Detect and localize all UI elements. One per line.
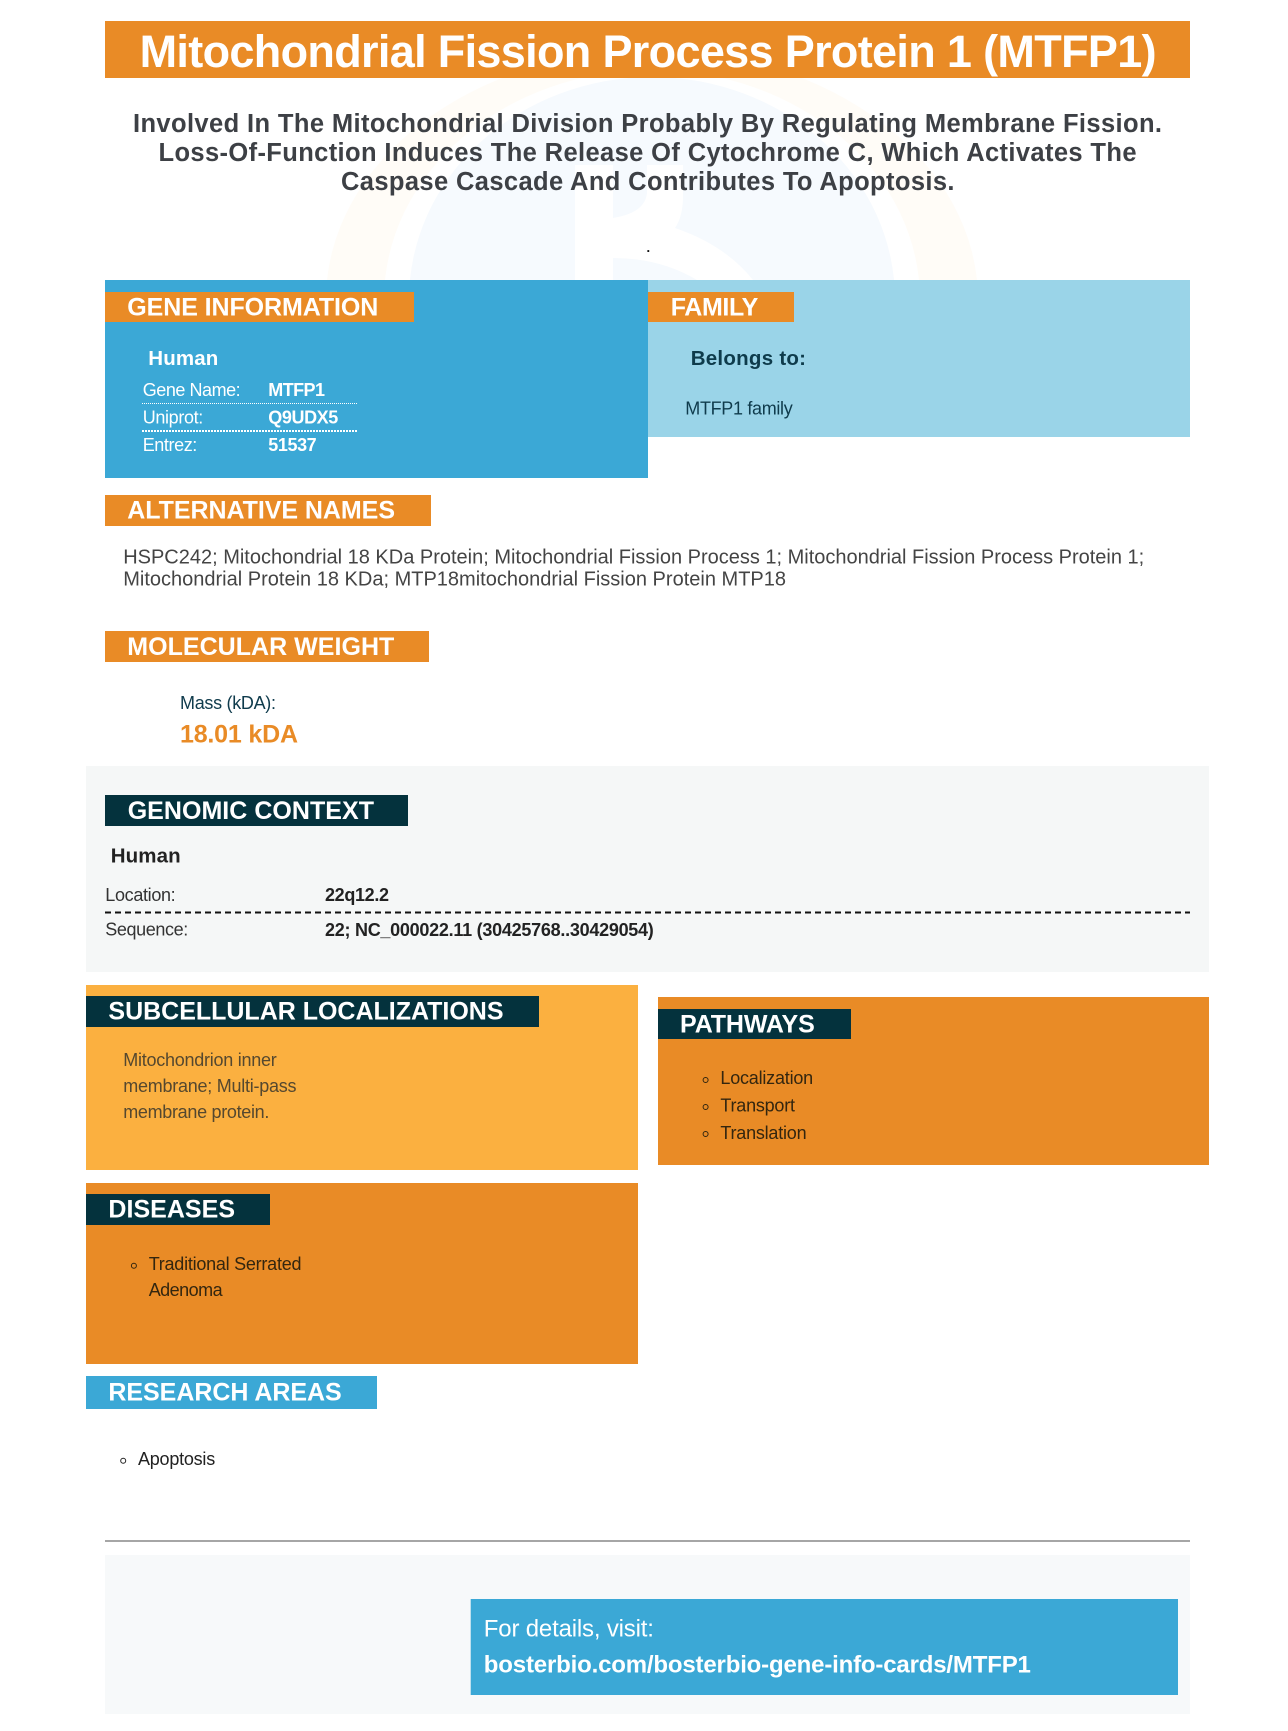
heading: diseases <box>86 1194 270 1225</box>
panel: footer <box>105 1555 1190 1714</box>
gene identifier table <box>142 380 357 455</box>
subtitle description <box>133 110 1162 196</box>
heading: alternative names: ALTERNATIVE NAMES <box>127 496 395 524</box>
callout: details link: For details, visit: <box>484 1616 654 1643</box>
subtitle description: Caspase Cascade And Contributes To Apoptosis. <box>341 168 954 196</box>
alternative names text: Mitochondrial Protein 18 KDa; MTP18mitochondrial Fission Protein MTP18 <box>123 568 786 590</box>
family name: MTFP1 family <box>685 398 793 418</box>
belongs to label: Belongs to: <box>691 347 806 370</box>
mass value: 18.01 kDA <box>180 721 298 749</box>
alternative names text: HSPC242; Mitochondrial 18 KDa Protein; Mitochondrial Fission Process 1; Mitochondrial Fission Process Protein 1; <box>123 546 1144 568</box>
panel: subcellular localizations <box>86 985 638 1170</box>
callout: details link: bosterbio.com/bosterbio-gene-info-cards/MTFP1 <box>484 1652 1031 1679</box>
watermark logo <box>410 78 894 280</box>
heading: genomic context: GENOMIC CONTEXT <box>128 797 374 825</box>
location row <box>105 885 389 905</box>
heading: diseases: DISEASES <box>108 1195 235 1223</box>
panel: genomic context <box>86 766 1209 972</box>
gene identifier table: Entrez: <box>143 435 197 455</box>
heading: gene information: GENE INFORMATION <box>127 293 378 321</box>
callout: details link <box>471 1599 1178 1695</box>
pathways list: Localization <box>720 1068 813 1088</box>
heading: pathways <box>658 1009 851 1039</box>
title banner: Mitochondrial Fission Process Protein 1 (MTFP1) <box>140 26 1157 77</box>
subtitle description: Involved In The Mitochondrial Division Probably By Regulating Membrane Fission. <box>133 110 1162 138</box>
research areas list: Apoptosis <box>138 1449 215 1469</box>
dot separator: . <box>646 240 650 255</box>
gene identifier table: MTFP1 <box>268 380 325 400</box>
diseases list: Traditional Serrated <box>149 1254 302 1274</box>
pathways list: Translation <box>720 1123 807 1143</box>
sequence row: Sequence: <box>105 920 188 940</box>
subtitle description: Loss-Of-Function Induces The Release Of Cytochrome C, Which Activates The <box>158 139 1136 167</box>
species label: Human <box>111 845 181 868</box>
panel: diseases <box>86 1183 638 1364</box>
heading: research areas <box>86 1376 377 1409</box>
localization text: membrane protein. <box>123 1102 269 1122</box>
panel: family <box>648 280 1190 437</box>
location row: Location: <box>105 885 176 905</box>
heading: molecular weight: MOLECULAR WEIGHT <box>127 633 394 661</box>
heading: family: FAMILY <box>671 293 759 321</box>
gene identifier table: Q9UDX5 <box>268 407 338 427</box>
species label: Human <box>148 347 218 370</box>
heading: research areas: RESEARCH AREAS <box>108 1379 342 1407</box>
localization text: membrane; Multi-pass <box>123 1076 296 1096</box>
alternative names text <box>123 546 1144 590</box>
diseases list: Adenoma <box>149 1280 224 1300</box>
gene identifier table: Uniprot: <box>143 407 203 427</box>
gene identifier table: 51537 <box>268 435 317 455</box>
localization text: Mitochondrion inner <box>123 1050 277 1070</box>
pathways list: Transport <box>720 1096 795 1116</box>
panel: pathways <box>658 997 1209 1165</box>
heading: subcellular localizations: SUBCELLULAR LOCALIZATIONS <box>108 997 504 1025</box>
panel: gene information <box>105 280 648 478</box>
heading: pathways: PATHWAYS <box>680 1010 815 1038</box>
location row: 22q12.2 <box>325 885 389 905</box>
sequence row: 22; NC_000022.11 (30425768..30429054) <box>325 920 654 940</box>
gene identifier table: Gene Name: <box>143 380 241 400</box>
heading: family <box>648 292 794 322</box>
mass label: Mass (kDA): <box>180 693 276 713</box>
diseases list <box>131 1254 302 1300</box>
localization text <box>123 1050 296 1122</box>
sequence row <box>105 920 654 940</box>
pathways list <box>703 1068 813 1143</box>
